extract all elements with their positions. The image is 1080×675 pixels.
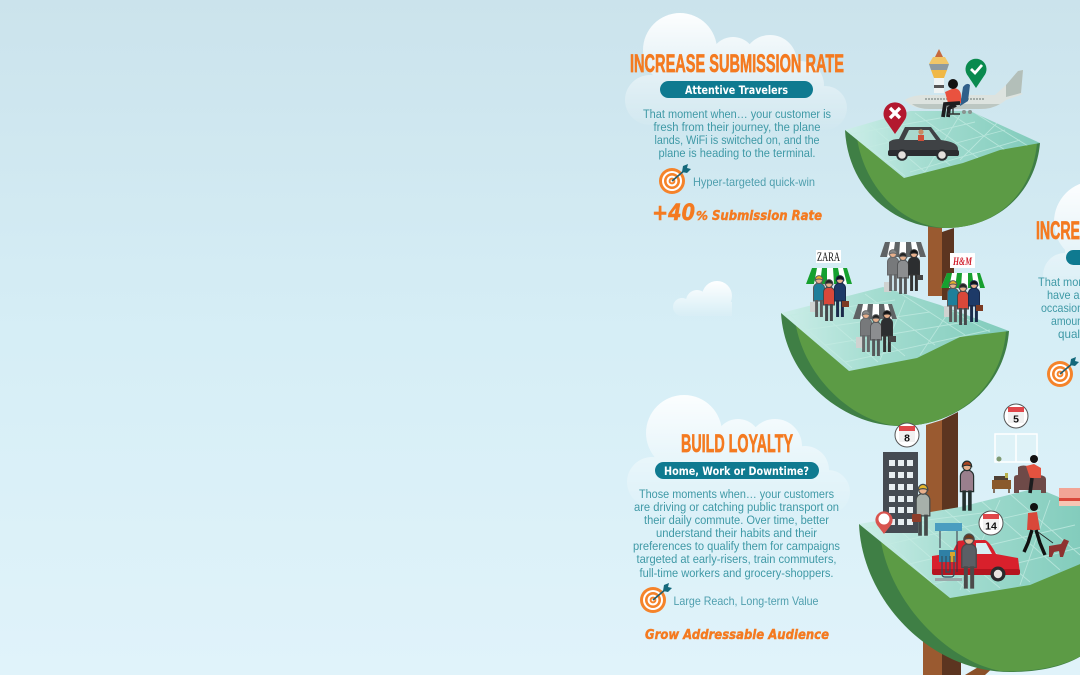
icon: H&M shop: H&M — [952, 254, 972, 268]
calendar badge: 5: 5 — [1013, 414, 1019, 426]
result: +40% submission rate: +40 — [652, 201, 695, 226]
result: +40% submission rate — [652, 201, 822, 226]
text panel: increase submission rate — [630, 50, 844, 226]
body text: full-time workers and grocery-shoppers. — [640, 566, 834, 580]
benefit text: Hyper-targeted quick-win — [693, 175, 815, 189]
island body — [781, 313, 1009, 426]
body text: targeted at early-risers, train commuters, — [636, 552, 836, 566]
icon: control tower — [929, 49, 949, 93]
body text: Those moments when… your customers — [639, 487, 834, 501]
calendar badge: 14: 14 — [985, 520, 997, 532]
icon: office building — [883, 452, 918, 533]
person: walking with phone — [1024, 503, 1053, 555]
pill: attentive travelers: Attentive Travelers — [685, 83, 788, 97]
people: grey shoppers back — [884, 250, 923, 294]
heading: BUILD LOYALTY — [681, 430, 793, 458]
icon: bench — [1059, 488, 1080, 506]
island body — [859, 524, 1080, 672]
body text: lands, WiFi is switched on, and the — [654, 133, 820, 147]
icon: ZARA shop: ZARA — [817, 250, 840, 264]
person: on armchair — [1014, 455, 1046, 493]
icon: grey shop back — [880, 242, 926, 257]
text panel: right edge, cropped — [1036, 217, 1080, 387]
people: ZARA shoppers — [810, 276, 849, 321]
body text: That moment when… your customer is — [643, 107, 831, 121]
pill: home, work or downtime: Home, Work or Downtime? — [664, 464, 809, 478]
person: seated traveller — [943, 79, 970, 117]
person: woman reading phone — [960, 461, 974, 511]
icon: window — [995, 434, 1037, 462]
icon: target — [1047, 357, 1079, 387]
panel: middle island, retail — [781, 242, 1009, 426]
people: grey shoppers front — [856, 311, 896, 356]
body text: are driving or catching public transport on — [634, 500, 839, 514]
icon: red car — [932, 540, 1020, 582]
body text: fresh from their journey, the plane — [654, 120, 821, 134]
cloud: top left — [625, 13, 847, 110]
body text — [643, 107, 831, 160]
calendar badge: 8: 8 — [904, 432, 910, 444]
panel: top island, airport — [845, 49, 1040, 228]
text panel: build loyalty — [633, 430, 840, 643]
calendar badge: 8 — [895, 423, 919, 447]
result: grow addressable audience: Grow Addressable Audience — [645, 627, 829, 643]
body text: their daily commute. Over time, better — [644, 513, 829, 527]
map surface — [845, 110, 1040, 178]
pill: attentive travelers — [660, 81, 813, 98]
benefit text: Large Reach, Long-term Value — [674, 594, 819, 608]
icon: target — [640, 583, 672, 613]
icon: grey shop front — [853, 304, 897, 319]
cloud: small middle — [673, 281, 732, 310]
heading: INCREASE SUBMISSION RATE — [630, 50, 844, 78]
body text: preferences to qualify them for campaigns — [633, 539, 840, 553]
calendar badge: 5 — [1004, 404, 1028, 428]
icon: side table — [992, 473, 1011, 493]
result: +40% submission rate: Submission Rate — [712, 209, 822, 224]
map surface — [859, 488, 1080, 598]
people: H&M shoppers — [944, 281, 983, 325]
result: +40% submission rate: % — [696, 209, 708, 223]
cloud: lower left — [627, 395, 848, 484]
icon: H&M shop — [941, 253, 985, 288]
icon: cross pin — [883, 102, 906, 134]
pill — [1066, 250, 1080, 265]
icon: dark car with driver — [888, 127, 959, 161]
person: man at fuel pump — [962, 534, 976, 589]
cloud: right edge — [1043, 184, 1080, 282]
icon: dog — [1049, 539, 1069, 557]
body text: understand their habits and their — [656, 526, 817, 540]
icon: ZARA shop — [806, 250, 852, 284]
icon: location pin — [875, 511, 893, 534]
body text: plane is heading to the terminal. — [658, 146, 816, 160]
icon: check pin — [966, 59, 986, 88]
body text — [1038, 275, 1080, 341]
icon: airplane — [905, 70, 1023, 114]
calendar badge: 14 — [979, 511, 1003, 535]
icon: target — [659, 164, 691, 194]
island body — [845, 130, 1040, 228]
map surface — [781, 287, 1009, 371]
panel: bottom island, daily life — [859, 404, 1080, 672]
tree trunk — [923, 226, 995, 675]
icon: fuel pump — [935, 523, 962, 581]
person: office worker — [912, 484, 930, 536]
body text — [633, 487, 840, 580]
